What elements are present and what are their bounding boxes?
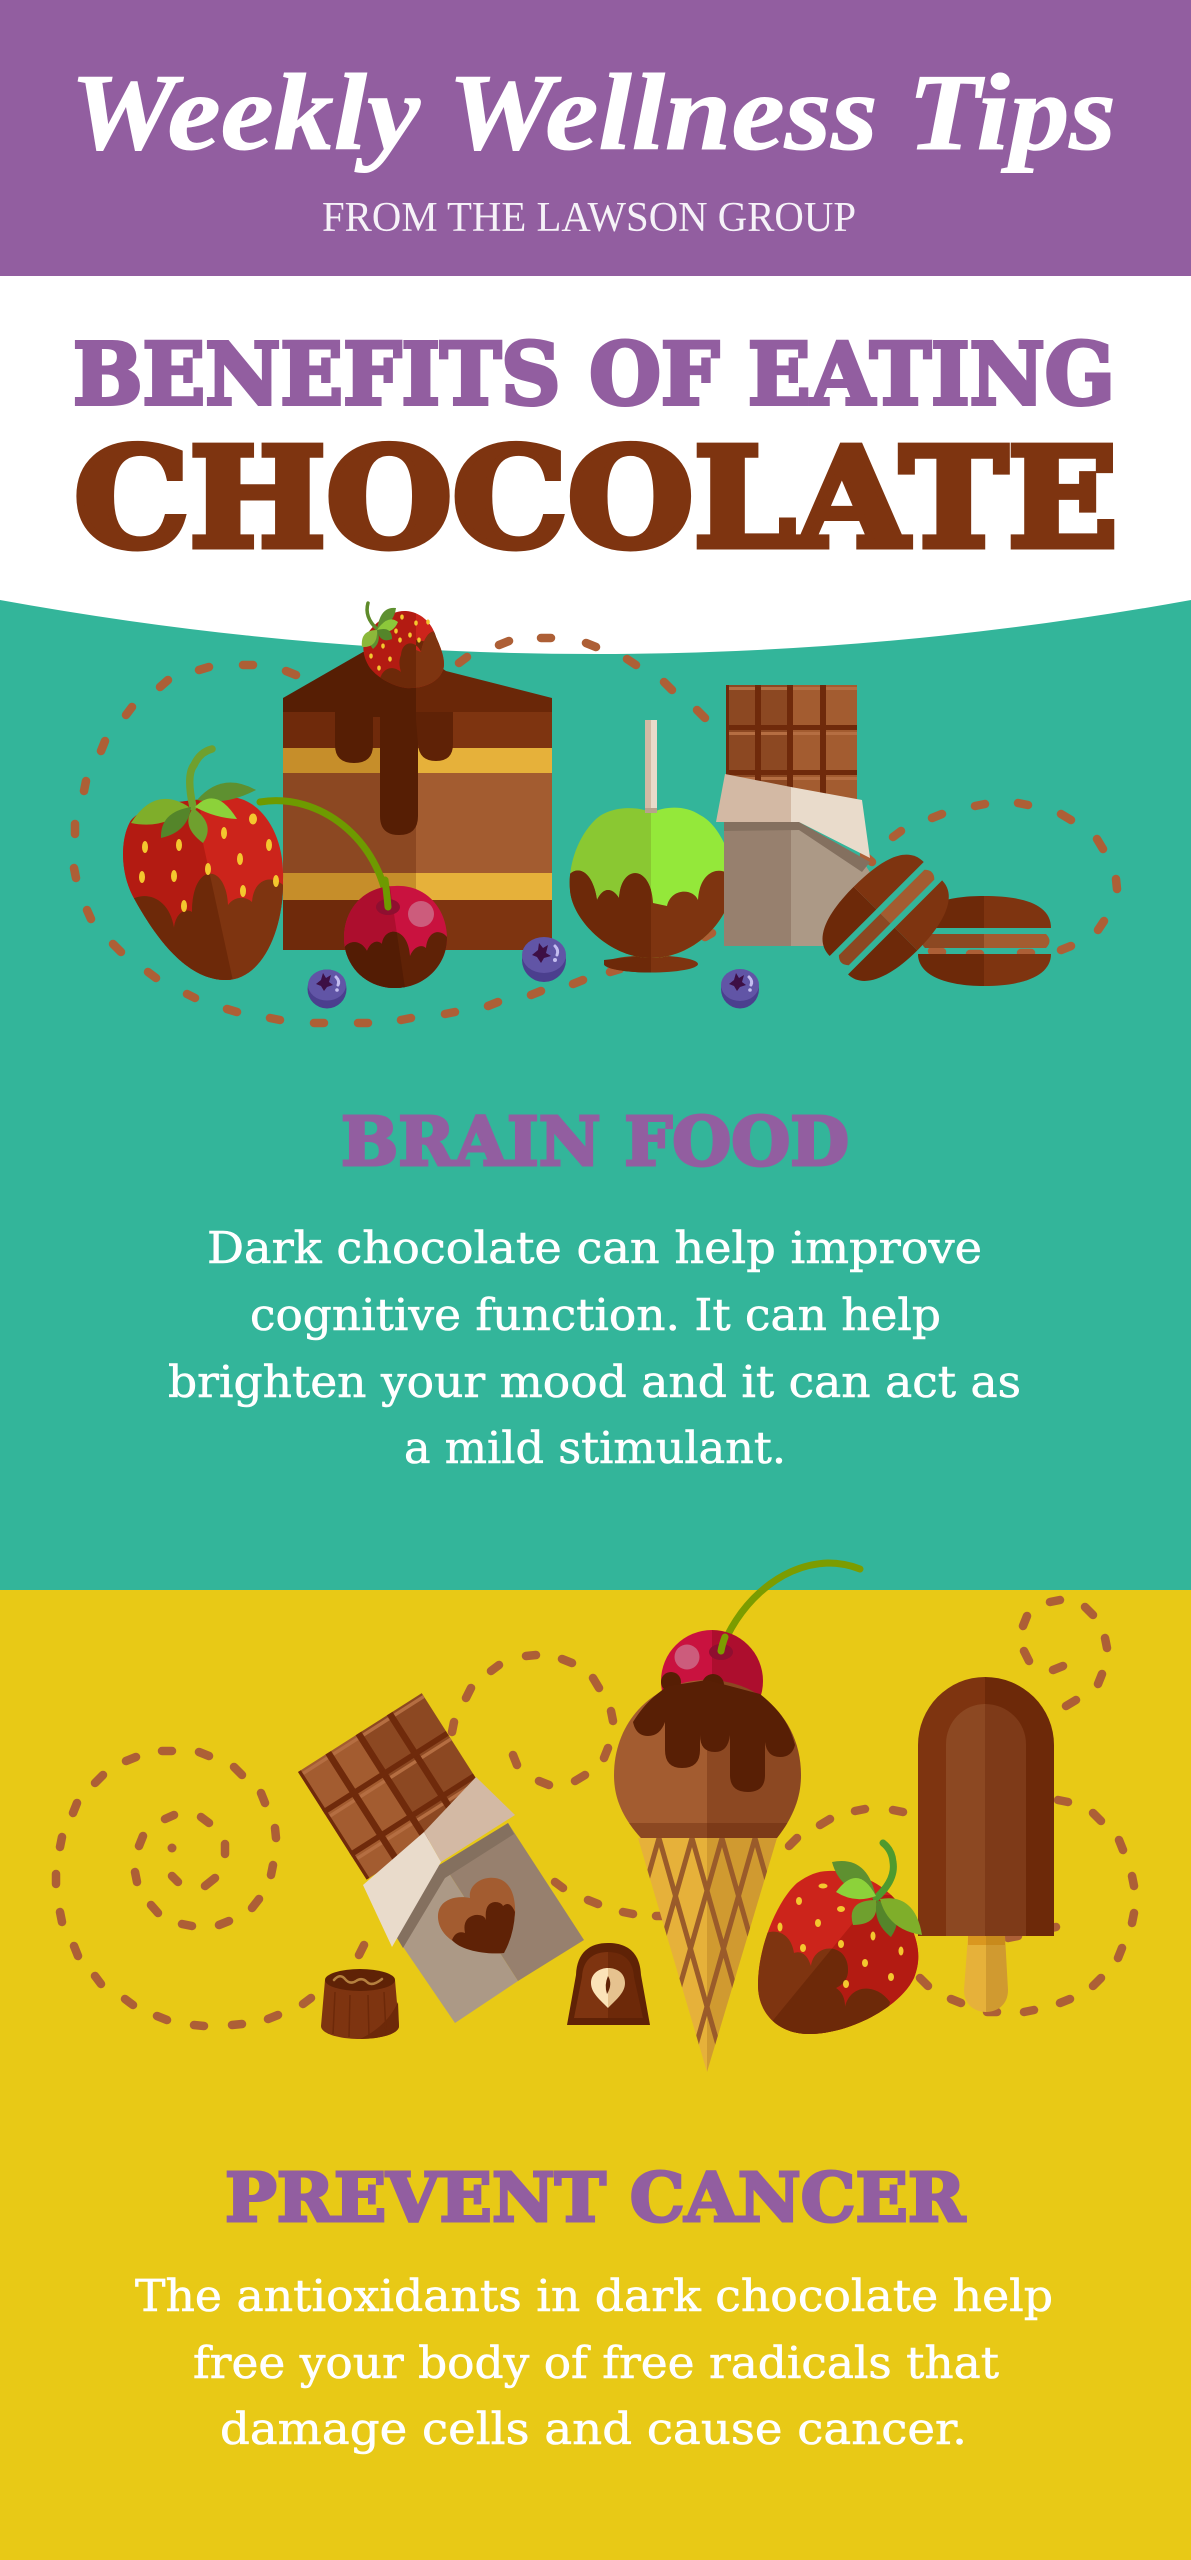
illustration: layered cake slice [283, 650, 552, 950]
panel: teal brain food section [0, 600, 1191, 1590]
text block: prevent cancer description [135, 2271, 1053, 2455]
title: weekly wellness tips: Weekly Wellness Tips [70, 52, 1116, 173]
text block: brain food description: brighten your mood and it can act as [168, 1357, 1021, 1408]
text block: prevent cancer description: The antioxidants in dark chocolate help [135, 2271, 1053, 2322]
panel: purple header [0, 0, 1191, 276]
text block: brain food description [168, 1223, 1021, 1474]
icon: blueberry left [308, 970, 346, 1008]
icon: hazelnut bonbon [567, 1943, 650, 2025]
dashed trail: yellow section [56, 1600, 1134, 2026]
text block: brain food description: cognitive function. It can help [250, 1290, 941, 1341]
icon: unwrapped chocolate bar [716, 685, 875, 946]
icon: ice cream cone [585, 1563, 860, 2098]
panel: yellow prevent cancer section [0, 1590, 1191, 2560]
icon: chocolate candy apple [570, 720, 724, 972]
icon: tilted chocolate bar with wrapper [298, 1693, 584, 2023]
dashed trail: teal section [74, 638, 1117, 1023]
icon: chocolate dipped cherry with stem [260, 801, 455, 995]
heading: prevent cancer: PREVENT CANCER [225, 2158, 966, 2237]
dot: spiral centre [168, 1844, 176, 1852]
icon: blueberry on cake [522, 937, 566, 982]
icon: blueberry right [721, 969, 759, 1008]
text block: prevent cancer description: damage cells and cause cancer. [220, 2404, 967, 2455]
text block: prevent cancer description: free your body of free radicals that [193, 2338, 999, 2389]
subtitle: from the lawson group: FROM THE LAWSON GROUP [322, 195, 856, 241]
text block: brain food description: Dark chocolate can help improve [207, 1223, 982, 1274]
text block: brain food description: a mild stimulant. [404, 1423, 786, 1474]
heading: chocolate: CHOCOLATE [74, 418, 1118, 579]
icon: chocolate dipped strawberry [123, 745, 284, 980]
icon: heart on wrapper [438, 1878, 515, 1953]
icon: small strawberry on cake [362, 601, 444, 688]
heading: benefits of eating: BENEFITS OF EATING [73, 325, 1115, 425]
icon: chocolate popsicle [918, 1677, 1054, 2012]
icon: chocolate cup truffle [321, 1969, 399, 2039]
icon: macaron stack [807, 839, 1051, 997]
icon: dipped strawberry right [758, 1840, 922, 2034]
heading: brain food: BRAIN FOOD [341, 1102, 849, 1181]
